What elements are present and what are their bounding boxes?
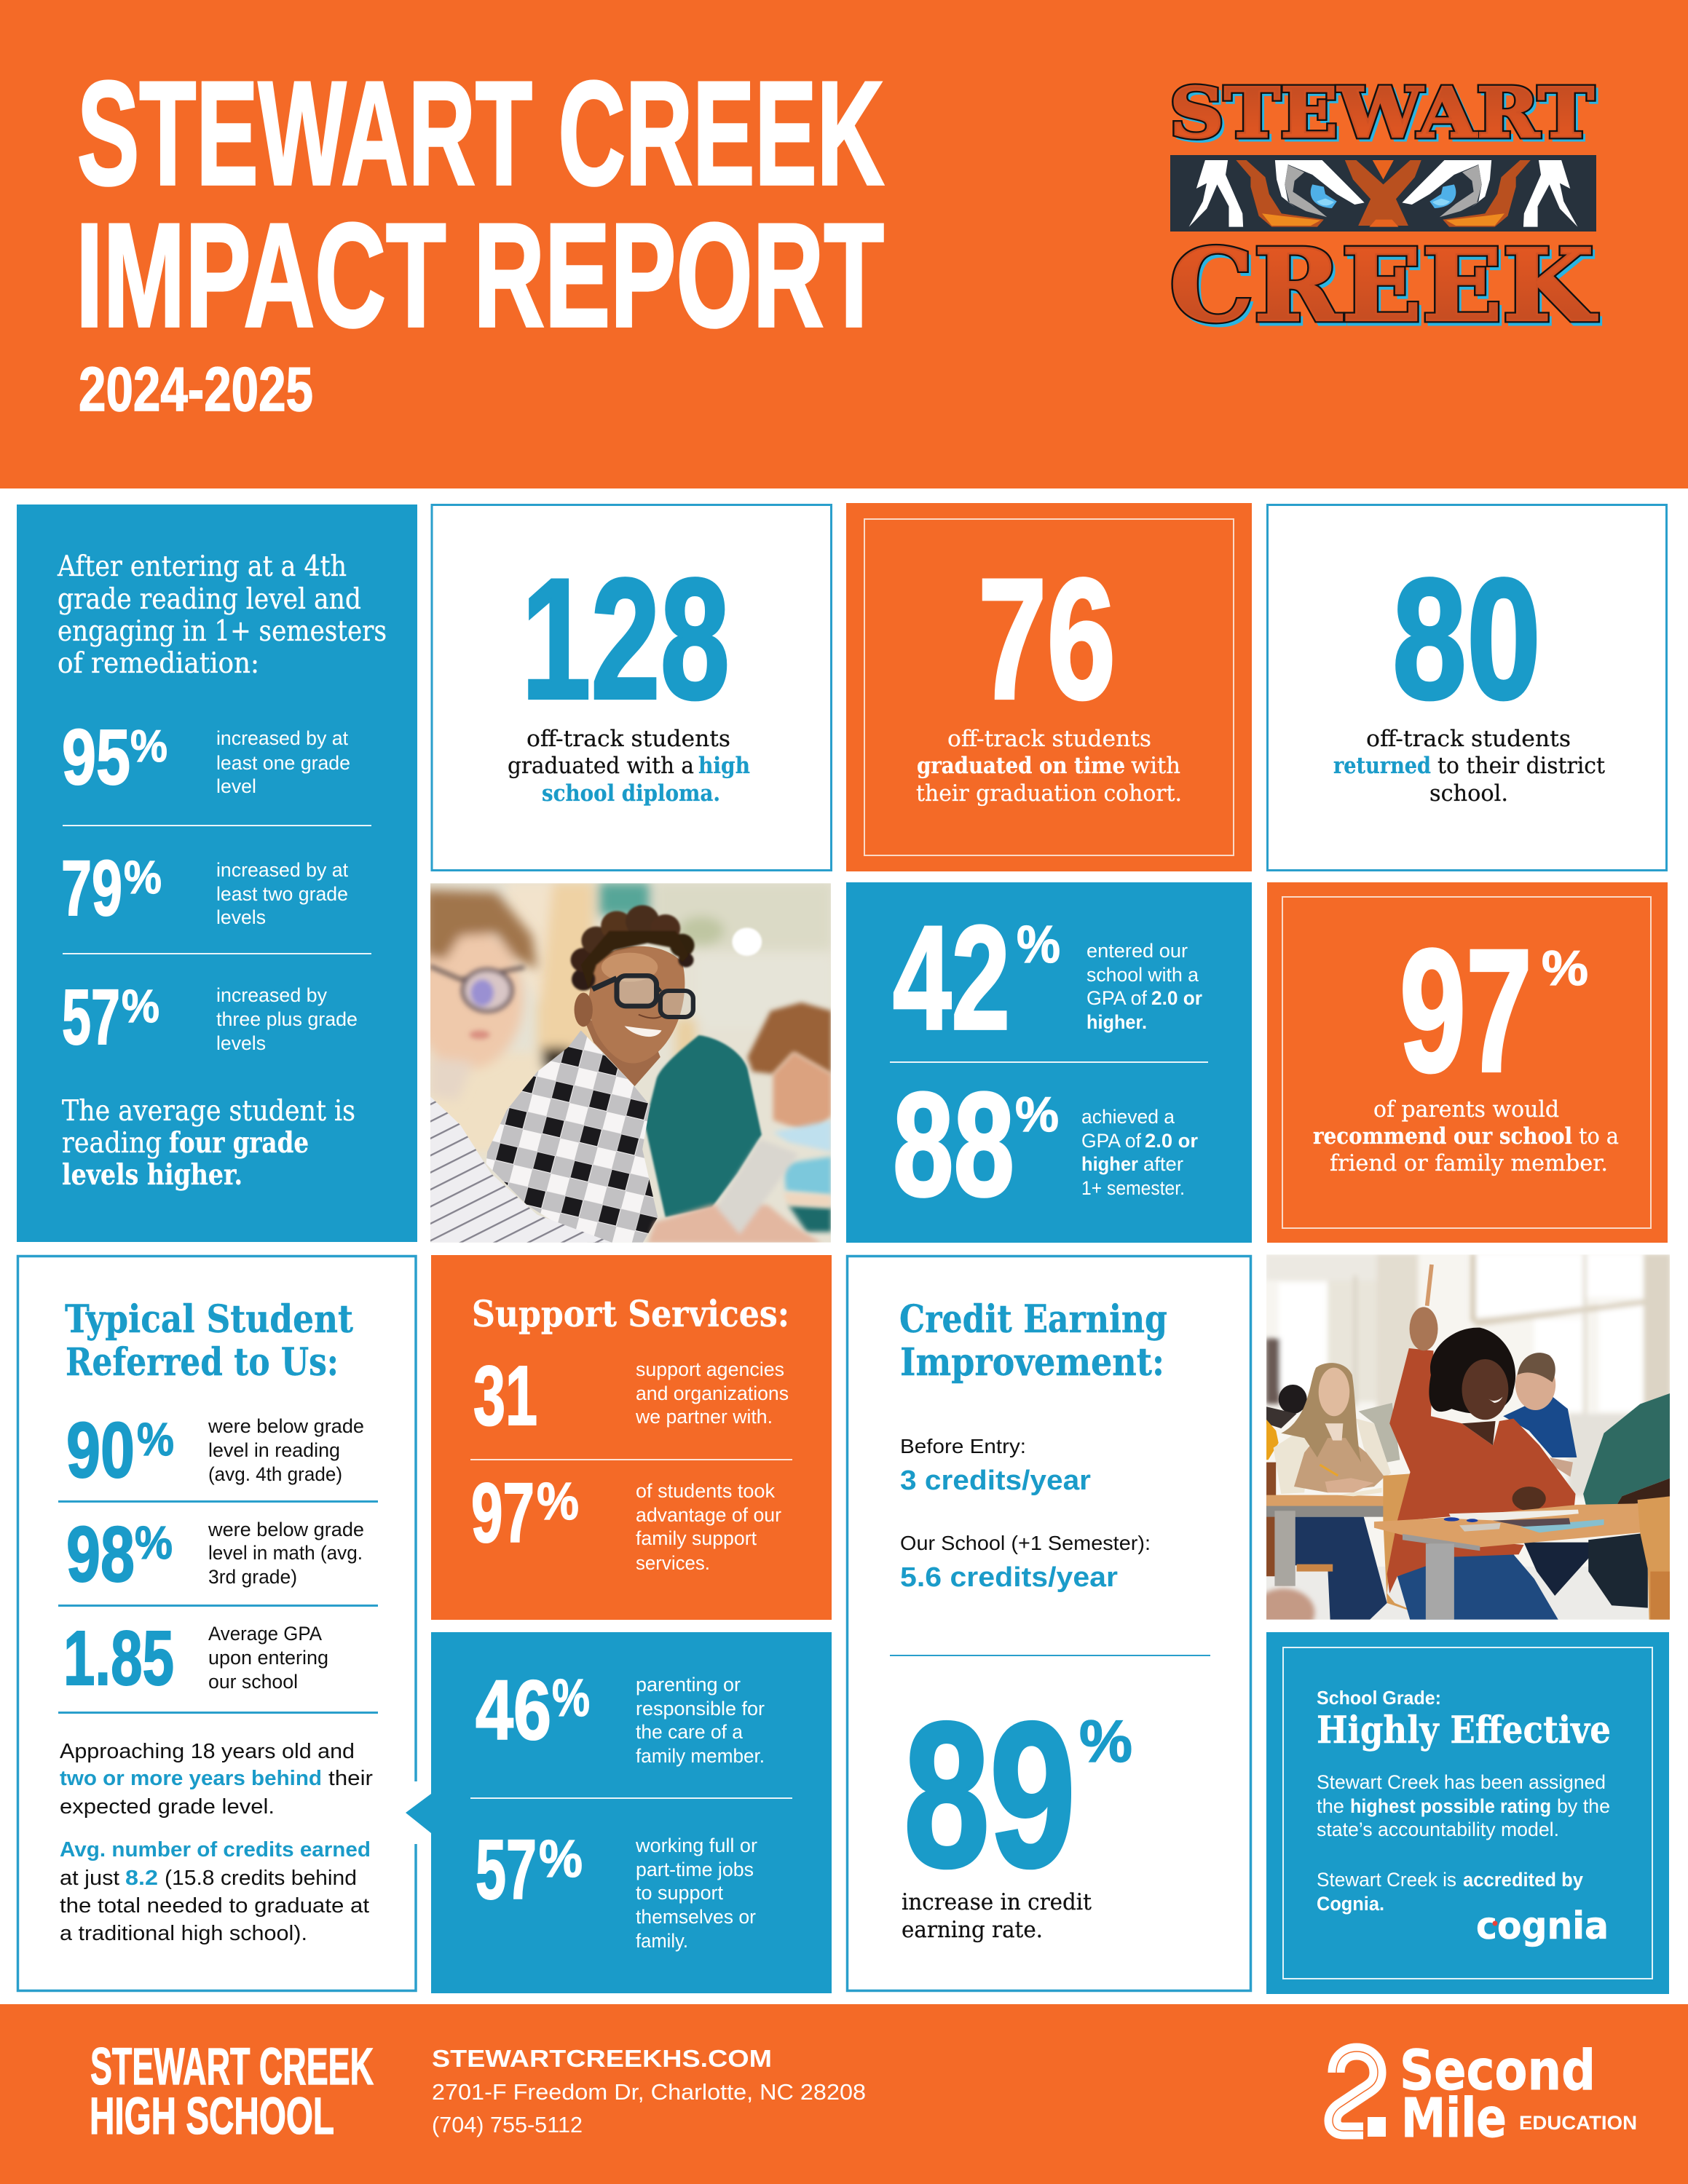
heading: Typical Student (65, 1297, 353, 1342)
stat: 79 percent: increased by at (216, 859, 348, 881)
stat: 90 percent reading: (avg. 4th grade) (208, 1463, 342, 1485)
before entry figure: Before Entry: (900, 1435, 1026, 1457)
caption: earning rate. (902, 1917, 1043, 1943)
school name: STEWART CREEK (90, 2038, 374, 2096)
caption (916, 726, 1182, 807)
stat: 97 percent support: of students took (636, 1480, 775, 1502)
stat: 31 agencies: support agencies (636, 1358, 784, 1380)
stat: 46 percent: % (552, 1669, 590, 1728)
stat: 57 percent working (476, 1822, 757, 1952)
stat: 1.85 GPA (63, 1615, 328, 1701)
big number 80: 80 (1392, 543, 1541, 735)
stat: 95 percent: level (216, 775, 256, 797)
caption: to a (1579, 1123, 1619, 1150)
stat: 79 percent: % (124, 851, 162, 903)
panel intro text: engaging in 1+ semesters (58, 615, 387, 648)
accreditation text: Stewart Creek is (1317, 1869, 1456, 1891)
stat: 57 percent working: 57 (476, 1822, 537, 1917)
stat: 46 percent: parenting or (636, 1674, 741, 1696)
logo: cognia: cognia (1476, 1904, 1609, 1948)
stat: 57 percent working: part-time jobs (636, 1859, 754, 1880)
caption: friend or family member. (1330, 1150, 1608, 1176)
stat: 90 percent reading: 90 (66, 1406, 135, 1494)
stat: 46 percent: family member. (636, 1745, 765, 1767)
grade heading (1317, 1687, 1611, 1752)
stat: 1.85 GPA: 1.85 (63, 1615, 174, 1701)
caption: with (1131, 753, 1180, 779)
stat: 95 percent: least one grade (216, 752, 350, 774)
year subtitle: 2024-2025 (79, 355, 313, 424)
stat: 90 percent reading: level in reading (208, 1439, 340, 1461)
text: approaching 18: Approaching 18 years old and (60, 1740, 355, 1763)
stat: 42 percent: entered our (1086, 940, 1188, 962)
big number 89 percent: 89 (904, 1679, 1076, 1910)
heading: Improvement: (900, 1340, 1164, 1385)
stat: 79 percent: least two grade (216, 883, 348, 905)
panel intro text: of remediation: (58, 647, 259, 680)
text: approaching 18: two or more years behind (60, 1767, 322, 1790)
text: average credits: (15.8 credits behind (165, 1867, 357, 1890)
panel conclusion text: reading (62, 1127, 162, 1160)
stat: 79 percent: levels (216, 906, 266, 928)
right student (1583, 1393, 1671, 1505)
rating text: Stewart Creek has been assigned (1317, 1771, 1606, 1793)
stat: 42 percent: 42 (893, 895, 1010, 1061)
caption: off-track students (1366, 726, 1571, 752)
contact details: STEWARTCREEKHS.COM (432, 2045, 772, 2072)
panel conclusion text: The average student is (62, 1095, 355, 1128)
stat: 42 percent (893, 895, 1202, 1061)
stat: 31 agencies: 31 (473, 1348, 537, 1443)
stat: 46 percent: the care of a (636, 1721, 744, 1743)
panel: 76 on time (846, 503, 1252, 871)
contact details: (704) 755-5112 (432, 2112, 583, 2137)
logo: Stewart Creek tiger eyes (1170, 73, 1601, 348)
stat: 88 percent: GPA of (1081, 1130, 1141, 1152)
panel intro text: grade reading level and (58, 583, 361, 616)
stat: 97 percent support (471, 1465, 781, 1574)
our school figure: Our School (+1 Semester): (900, 1532, 1151, 1554)
text: average credits: a traditional high school). (60, 1922, 307, 1945)
panel conclusion text (62, 1095, 355, 1192)
stat: 57 percent working: themselves or (636, 1906, 756, 1928)
rating text: highest possible rating (1350, 1795, 1551, 1817)
panel: 80 returned (1267, 505, 1666, 871)
stat: 97 percent support: % (537, 1473, 579, 1531)
logo: Second Mile Education: EDUCATION (1519, 2112, 1637, 2134)
stat: 57 percent working: % (539, 1830, 583, 1888)
caption: returned (1333, 753, 1431, 779)
desk and supplies (1374, 1496, 1671, 1621)
heading (65, 1297, 353, 1385)
school name: HIGH SCHOOL (90, 2088, 334, 2145)
contact details (432, 2045, 866, 2137)
panel intro text: After entering at a 4th (57, 550, 347, 583)
stat: 57 percent working: to support (636, 1882, 723, 1904)
stat: 57 percent: 57 (62, 973, 120, 1061)
blurred student at left (413, 890, 537, 1101)
stat: 57 percent working: family. (636, 1930, 688, 1952)
caption: of parents would (1373, 1096, 1559, 1123)
panel: 97 percent of parents (1267, 882, 1668, 1243)
logo: Stewart Creek tiger eyes: CREEK (1170, 227, 1598, 344)
stat: 31 agencies: we partner with. (635, 1406, 773, 1428)
stat: 97 percent support: advantage of our (636, 1504, 781, 1526)
stat: 88 percent: 1+ semester. (1081, 1177, 1185, 1199)
caption: school diploma. (542, 780, 720, 807)
school name (90, 2038, 374, 2145)
text: approaching 18 (60, 1740, 373, 1819)
stat: 98 percent math (66, 1510, 364, 1598)
caption: off-track students (947, 726, 1151, 752)
stat: 90 percent reading: were below grade (208, 1415, 364, 1437)
stat: 79 percent (61, 844, 348, 932)
stat: 88 percent: 88 (893, 1062, 1014, 1227)
stat: 1.85 GPA: Average GPA (208, 1623, 322, 1645)
logo: Stewart Creek tiger eyes: CREEK (1170, 227, 1598, 344)
photo: smiling student with glasses (413, 882, 832, 1243)
caption: to their district (1437, 753, 1606, 779)
stat: 88 percent: 2.0 or (1145, 1130, 1198, 1152)
photo: student raising hand in classroom (1253, 1254, 1671, 1637)
heading: Support Services: (472, 1292, 789, 1335)
panel: support services (431, 1255, 832, 1620)
stat: 42 percent: GPA of (1086, 987, 1147, 1009)
caption: graduated with a (508, 753, 694, 779)
main student (1387, 1265, 1576, 1621)
panel: school grade (1266, 1632, 1669, 1994)
stat: 95 percent: 95 (62, 713, 130, 801)
panel: credit earning improvement (848, 1257, 1251, 1990)
big number 76: 76 (978, 543, 1116, 735)
stat: 95 percent: % (130, 721, 167, 772)
accreditation text: Cognia. (1317, 1893, 1384, 1915)
stat: 42 percent: 2.0 or (1151, 987, 1202, 1009)
title: IMPACT REPORT (76, 193, 884, 358)
rating text (1317, 1771, 1610, 1840)
stat: 42 percent: school with a (1086, 964, 1199, 986)
before entry figure (900, 1435, 1091, 1496)
stat: 57 percent (62, 973, 358, 1061)
caption (902, 1889, 1092, 1943)
logo: Second Mile Education: Mile (1401, 2087, 1507, 2150)
logo: Stewart Creek tiger eyes: CREEK (1172, 231, 1601, 348)
stat: 90 percent reading: % (137, 1413, 174, 1465)
heading (899, 1297, 1167, 1385)
text: approaching 18: their (328, 1767, 373, 1790)
caption (1333, 726, 1606, 807)
caption: high (698, 753, 750, 779)
caption (1313, 1096, 1619, 1176)
panel: GPA stats (846, 882, 1252, 1243)
stat: 79 percent: 79 (61, 844, 122, 932)
stat: 88 percent: achieved a (1081, 1106, 1175, 1128)
big number 89 percent: % (1079, 1709, 1132, 1775)
rating text: by the (1557, 1795, 1610, 1817)
text: average credits (60, 1838, 371, 1945)
stat: 57 percent: levels (216, 1032, 266, 1054)
rating text: the (1317, 1795, 1344, 1817)
stat: 98 percent math: 98 (66, 1510, 135, 1598)
text: average credits: at just (60, 1867, 119, 1890)
rating text: state’s accountability model. (1317, 1819, 1559, 1840)
panel conclusion text: levels higher. (62, 1158, 242, 1192)
stat: 31 agencies (473, 1348, 789, 1443)
stat: 46 percent (476, 1663, 765, 1767)
panel: 128 graduates (432, 505, 832, 871)
stat: 95 percent (62, 713, 350, 801)
caption (508, 726, 750, 807)
stat: 98 percent math: were below grade (208, 1519, 364, 1540)
stat: 42 percent: % (1017, 916, 1060, 974)
stat: 57 percent: three plus grade (216, 1008, 358, 1030)
caption: off-track students (526, 726, 730, 752)
panel: reading growth (17, 505, 417, 1242)
stat: 46 percent: responsible for (636, 1698, 765, 1720)
panel intro text (57, 550, 387, 680)
heading: Referred to Us: (66, 1340, 339, 1385)
stat: 97 percent support: 97 (471, 1465, 535, 1560)
text: average credits: Avg. number of credits earned (60, 1838, 371, 1861)
title (76, 51, 884, 358)
text: average credits: 8.2 (125, 1867, 158, 1890)
caption: graduated on time (917, 753, 1125, 779)
stat: 95 percent: increased by at (216, 727, 348, 749)
logo: Stewart Creek tiger eyes: STEWART (1170, 73, 1594, 154)
stat: 46 percent: 46 (476, 1663, 551, 1757)
chair (1383, 1473, 1410, 1610)
stat: 98 percent math: level in math (avg. (208, 1542, 363, 1564)
stat: 98 percent math: % (135, 1516, 173, 1569)
big number 97: % (1542, 941, 1588, 996)
caption: recommend our school (1313, 1123, 1572, 1150)
text: average credits: the total needed to graduate at (60, 1894, 369, 1918)
panel: typical student (17, 1257, 416, 1990)
caption: school. (1429, 780, 1508, 807)
background students (1266, 1353, 1590, 1621)
our school figure: 5.6 credits/year (900, 1562, 1118, 1593)
logo: Stewart Creek tiger eyes: STEWART (1172, 76, 1597, 157)
logo: Stewart Creek tiger eyes: STEWART (1170, 73, 1594, 154)
contact details: 2701-F Freedom Dr, Charlotte, NC 28208 (432, 2079, 866, 2105)
caption: their graduation cohort. (916, 780, 1182, 807)
accreditation text (1317, 1869, 1583, 1915)
logo: Second Mile Education: Second (1400, 2038, 1596, 2102)
stat: 31 agencies: and organizations (636, 1382, 789, 1404)
stat: 90 percent reading (66, 1406, 364, 1494)
panel: family responsibilities with pointer arrow (406, 1632, 832, 1993)
grade heading: Highly Effective (1317, 1709, 1611, 1752)
big number 128: 128 (521, 543, 730, 735)
stat: 1.85 GPA: our school (208, 1671, 298, 1693)
caption: increase in credit (902, 1889, 1092, 1915)
stat: 88 percent (893, 1062, 1198, 1227)
stat: 42 percent: higher. (1086, 1011, 1147, 1033)
heading: Credit Earning (899, 1297, 1167, 1342)
panel conclusion text: four grade (169, 1126, 309, 1160)
big number 97: 97 (1400, 913, 1532, 1108)
stat: 88 percent: higher (1081, 1153, 1138, 1175)
stat: 57 percent: increased by (216, 984, 327, 1006)
accreditation text: accredited by (1463, 1869, 1583, 1891)
grade heading: School Grade: (1317, 1687, 1441, 1709)
sub-detail: student neck and face (571, 905, 695, 1086)
curly hair (571, 905, 695, 991)
stat: 97 percent support: services. (636, 1552, 710, 1574)
arrow pointer (406, 1794, 431, 1833)
title: STEWART CREEK (77, 51, 884, 216)
our school figure (900, 1532, 1151, 1593)
text: approaching 18: expected grade level. (60, 1795, 275, 1819)
before entry figure: 3 credits/year (900, 1465, 1091, 1496)
stat: 98 percent math: 3rd grade) (208, 1566, 297, 1588)
stat: 88 percent: after (1143, 1153, 1183, 1175)
stat: 57 percent working: working full or (635, 1835, 757, 1856)
stat: 88 percent: % (1015, 1087, 1059, 1142)
stat: 57 percent: % (122, 980, 159, 1032)
header band (0, 0, 1688, 488)
logo: Second Mile Education (1333, 2038, 1637, 2150)
footer band (0, 2004, 1688, 2184)
stat: 1.85 GPA: upon entering (208, 1647, 328, 1669)
stat: 97 percent support: family support (636, 1527, 757, 1549)
